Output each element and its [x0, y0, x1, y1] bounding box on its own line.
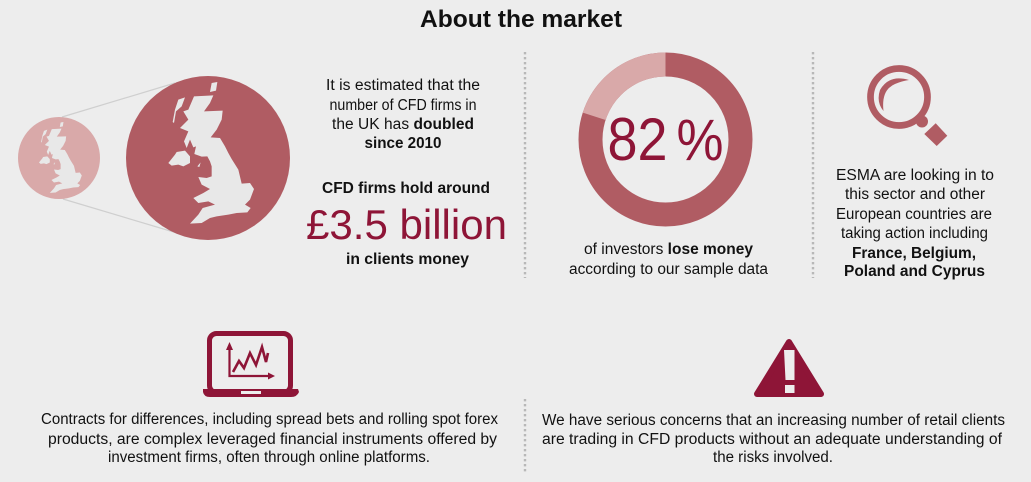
chart: 82% donut: % [676, 108, 724, 173]
connector lines [62, 83, 177, 233]
text: investors lose money: of investors lose money [584, 241, 753, 258]
divider lines [525, 52, 813, 472]
text: ESMA: taking action including [841, 225, 988, 242]
text: client money stat: £3.5 billion [306, 201, 507, 248]
icon: magnifying glass [870, 68, 947, 146]
text: concerns description: We have serious concerns that an increasing number of retail clients [542, 412, 1005, 429]
text: ESMA: ESMA are looking in to [836, 167, 994, 184]
text: concerns description: are trading in CFD products without an adequate understanding of [542, 431, 1003, 448]
text: concerns description [542, 412, 1005, 466]
icon: laptop chart [203, 334, 299, 397]
title: About the market [420, 6, 622, 33]
text: ESMA: France, Belgium, [852, 245, 976, 262]
text: contracts description: products, are complex leveraged financial instruments offered by [48, 431, 497, 448]
text: ESMA: European countries are [836, 206, 992, 223]
text: investors lose money [569, 241, 768, 278]
text: CFD firm growth: the UK has doubled [332, 116, 474, 133]
text: contracts description: investment firms, often through online platforms. [108, 449, 430, 466]
chart: 82% donut [583, 52, 740, 214]
text: CFD firm growth: since 2010 [364, 135, 442, 152]
text: client money stat: CFD firms hold around [322, 180, 490, 197]
text: ESMA [836, 167, 994, 280]
icon: large UK circle [126, 76, 290, 240]
text: contracts description [41, 411, 498, 466]
text: CFD firm growth: It is estimated that the [326, 77, 480, 94]
text: ESMA: Poland and Cyprus [844, 263, 985, 280]
panel: UK map zoom [18, 76, 290, 240]
text: ESMA: this sector and other [845, 186, 985, 203]
chart: 82% donut: 82 [608, 106, 668, 173]
text: CFD firm growth [326, 77, 480, 152]
text: CFD firm growth: number of CFD firms in [330, 97, 476, 114]
text: investors lose money: according to our sample data [569, 261, 768, 278]
icon: small UK circle [18, 117, 100, 199]
text: client money stat [306, 180, 507, 268]
text: client money stat: in clients money [346, 251, 469, 268]
icon: warning triangle [757, 342, 821, 394]
text: contracts description: Contracts for differences, including spread bets and rolling spot forex [41, 411, 498, 428]
text: concerns description: the risks involved. [713, 449, 833, 466]
